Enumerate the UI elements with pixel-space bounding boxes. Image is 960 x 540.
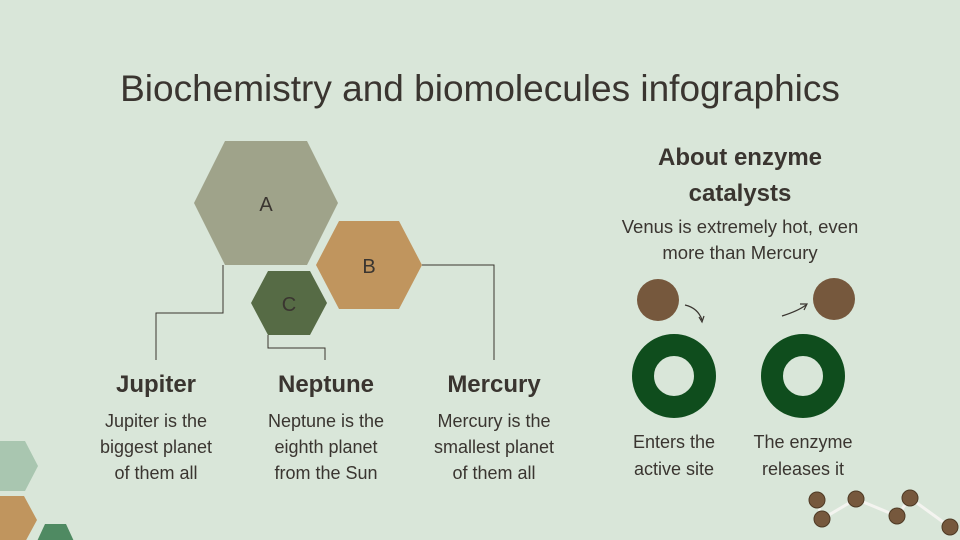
enzyme step 1 xyxy=(637,279,705,407)
Neptune block: Neptune is the xyxy=(268,411,384,431)
enzyme description: Venus is extremely hot, even xyxy=(622,216,858,237)
enzyme step 2 xyxy=(772,278,855,407)
Mercury block: Mercury is the xyxy=(437,411,551,431)
hexagon B xyxy=(316,221,422,309)
enzyme heading: About enzyme xyxy=(658,144,822,171)
decorative hexagons bottom-left xyxy=(0,441,78,540)
molecule chain xyxy=(809,490,958,535)
enzyme heading xyxy=(658,144,822,207)
Jupiter block: Jupiter xyxy=(116,371,196,398)
step 2 label xyxy=(753,432,853,479)
hexagon C: C xyxy=(282,294,296,316)
Neptune block: from the Sun xyxy=(274,463,378,483)
step 2 label: releases it xyxy=(762,459,844,479)
Jupiter block: of them all xyxy=(114,463,198,483)
step 1 label: active site xyxy=(634,459,714,479)
Mercury block xyxy=(434,371,554,483)
step 1 label xyxy=(633,432,715,479)
step 2 label: The enzyme xyxy=(753,432,853,452)
Mercury block: of them all xyxy=(452,463,536,483)
hexagon A: A xyxy=(259,194,273,216)
Jupiter block xyxy=(100,371,212,483)
title: Biochemistry and biomolecules infographics xyxy=(120,68,840,109)
enzyme description xyxy=(622,216,858,263)
Neptune block: Neptune xyxy=(278,371,374,398)
hexagon A xyxy=(194,141,338,265)
Neptune block xyxy=(268,371,384,483)
enzyme description: more than Mercury xyxy=(662,242,818,263)
Jupiter block: biggest planet xyxy=(100,437,212,457)
Mercury block: smallest planet xyxy=(434,437,554,457)
step 1 label: Enters the xyxy=(633,432,715,452)
Jupiter block: Jupiter is the xyxy=(105,411,207,431)
Neptune block: eighth planet xyxy=(274,437,378,457)
connector lines xyxy=(156,265,494,360)
hexagon B: B xyxy=(362,256,376,278)
enzyme heading: catalysts xyxy=(689,180,791,207)
Mercury block: Mercury xyxy=(447,371,541,398)
hexagon C xyxy=(251,271,327,335)
